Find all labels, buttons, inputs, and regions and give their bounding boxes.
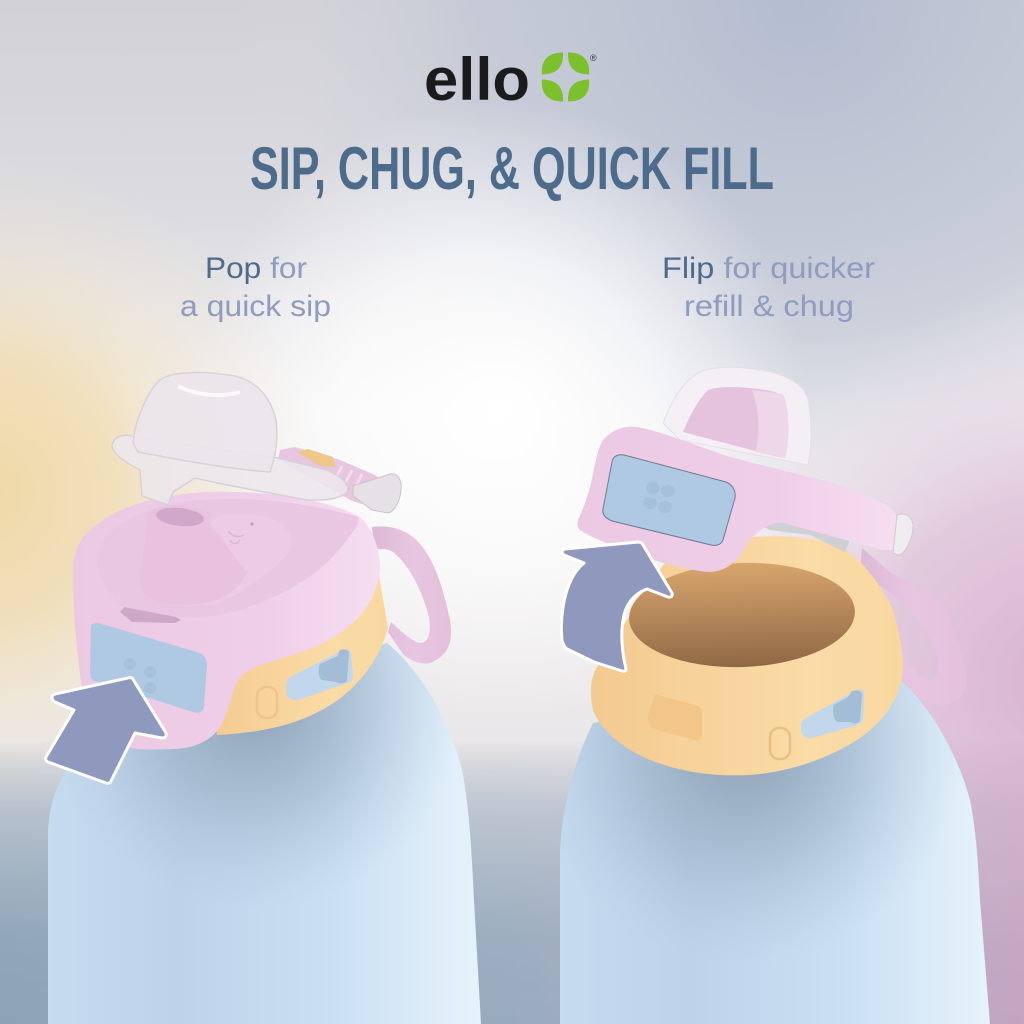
caption: flip: refill & chug [684, 290, 854, 323]
handle left [372, 526, 451, 663]
bottle shadow right [560, 680, 985, 1000]
caption: flip: Flip for quicker [662, 252, 875, 285]
handle right [860, 548, 967, 705]
spout [140, 506, 247, 605]
bear face [228, 522, 254, 543]
cap highlight [178, 386, 240, 395]
caption: pop: a quick sip [180, 290, 331, 323]
bottle body left [48, 643, 481, 1024]
arrow right [561, 542, 672, 671]
clear cap right [663, 367, 811, 465]
lid recess [97, 499, 359, 618]
slot [120, 607, 181, 623]
bottle shadow left [48, 643, 470, 1000]
cap dome [133, 373, 277, 472]
spout hole [155, 506, 205, 528]
caption: pop [180, 252, 331, 323]
logo: ello [424, 46, 597, 113]
right bottle [560, 367, 990, 1024]
clear tip [353, 474, 401, 513]
collar tab [648, 694, 702, 740]
logo wordmark: ello [424, 46, 530, 113]
cap brim [112, 435, 348, 505]
straw ribs [336, 466, 362, 486]
bear seal [142, 514, 292, 606]
button right [603, 455, 735, 545]
straw yellow band [297, 449, 335, 467]
yellow collar left [200, 560, 388, 735]
caption: flip [662, 252, 875, 323]
yellow collar right [591, 536, 903, 775]
hinge tip right [893, 514, 913, 555]
title: SIP, CHUG, & QUICK FILL [250, 135, 774, 202]
arrow left [46, 678, 166, 783]
core highlight [752, 390, 789, 458]
left bottle [46, 373, 481, 1024]
clear cap left [112, 373, 401, 513]
hinge strut [760, 520, 850, 552]
pink core right [683, 387, 788, 458]
straw strap [278, 447, 395, 512]
button left [90, 623, 207, 713]
collar latch right [770, 689, 864, 759]
pink lid left [73, 492, 380, 750]
caption: pop: Pop for [205, 252, 307, 285]
pink lid right [577, 427, 899, 572]
cup opening [627, 559, 857, 671]
bottle body right [560, 680, 990, 1024]
registered mark: ® [590, 53, 597, 63]
logo icon [542, 52, 589, 102]
collar latch left [257, 649, 353, 718]
